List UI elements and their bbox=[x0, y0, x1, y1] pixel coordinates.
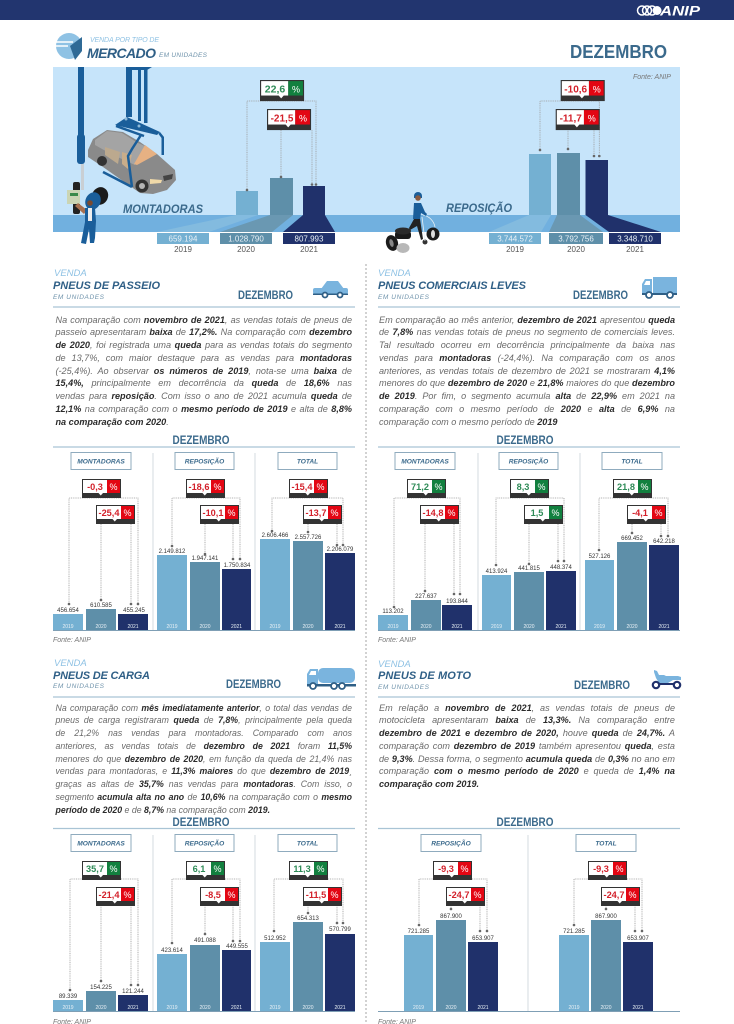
group: reposição: 1,5 bbox=[531, 508, 543, 518]
label: MONTADORAS: MONTADORAS bbox=[123, 202, 203, 216]
group: total: 654.313 bbox=[297, 916, 320, 922]
group: montadoras: 35,7 bbox=[86, 864, 104, 874]
text: comerciais leves analysis: comparação com o mesmo período de 2019 bbox=[379, 417, 557, 427]
chart: montadoras bars: 2021 bbox=[300, 245, 318, 254]
callout: -21,5%: -21,5 bbox=[271, 114, 294, 124]
group: montadoras: 2019 bbox=[62, 624, 74, 630]
group: total: 11,3 bbox=[293, 864, 311, 874]
chart: reposição bars: 2020 bbox=[567, 245, 585, 254]
group: total: -13,7 bbox=[306, 508, 326, 518]
text: carga analysis: pneus de carga registraram queda de 7,8%, principalmente pela queda bbox=[56, 715, 352, 725]
text: passeio analysis: na comparação com 2020. bbox=[56, 417, 169, 427]
text: passeio analysis: vendas para reposição. Com isso o ano de 2021 acumula queda de bbox=[56, 391, 352, 401]
group: reposição: 413.924 bbox=[486, 569, 508, 575]
text: comerciais leves analysis: Em comparação ao mês anterior, dezembro de 2021 apresentou queda bbox=[379, 314, 675, 324]
heading: pneus de passeio: VENDA bbox=[54, 268, 87, 279]
text: carga analysis: menores do que dezembro de 2020, em função da queda de 21,4% nas bbox=[56, 754, 352, 764]
text: comerciais leves analysis bbox=[379, 314, 675, 430]
group: total: 2020 bbox=[626, 624, 638, 630]
group: montadoras: 71,2 bbox=[411, 482, 429, 492]
group: total: 570.799 bbox=[329, 927, 352, 933]
text: carga analysis: anteriores, as vendas totais de dezembro de 2021 foram 11,5% bbox=[56, 741, 352, 751]
title block: VENDA POR TIPO DE bbox=[90, 37, 159, 44]
callout: -10,6% bbox=[561, 80, 605, 101]
group: reposição: -24,7 bbox=[449, 890, 469, 900]
chart: montadoras bars bbox=[157, 101, 335, 254]
group: total: TOTAL bbox=[595, 840, 617, 848]
group: reposição: % bbox=[227, 508, 236, 518]
group: total: % bbox=[316, 864, 325, 874]
group: reposição: 2020 bbox=[445, 1005, 457, 1011]
group: total: % bbox=[330, 508, 339, 518]
group: reposição: 448.374 bbox=[550, 565, 572, 571]
group: montadoras: 2020 bbox=[95, 624, 107, 630]
chart panel: comerciais leves dezembro: DEZEMBRO bbox=[496, 435, 554, 447]
group: montadoras: % bbox=[123, 508, 132, 518]
group: reposição: -9,3 bbox=[438, 864, 454, 874]
group: montadoras bbox=[53, 834, 148, 1011]
group: montadoras: MONTADORAS bbox=[77, 458, 125, 466]
panel: hero market overview bbox=[53, 67, 680, 254]
text: moto analysis: Em relação a novembro de 2021, as vendas totais de pneus de bbox=[379, 702, 675, 712]
group: reposição: 2019 bbox=[491, 624, 502, 630]
group: total: 2.606.466 bbox=[262, 533, 289, 539]
heading: comerciais leves: VENDA bbox=[378, 268, 411, 279]
text: carga analysis: de 21,2% nas vendas para montadoras. Comparado com anos bbox=[56, 728, 352, 738]
group: reposição bbox=[157, 452, 251, 630]
title block: EM UNIDADES bbox=[159, 52, 208, 59]
group: reposição: 2.149.812 bbox=[159, 549, 186, 555]
group: total: 653.907 bbox=[627, 936, 650, 942]
group: total bbox=[260, 834, 355, 1011]
heading: comerciais leves: DEZEMBRO bbox=[573, 290, 628, 302]
group: total: 2019 bbox=[594, 624, 605, 630]
icon: car bbox=[313, 281, 348, 298]
text: moto analysis bbox=[379, 702, 675, 792]
group: total: % bbox=[615, 864, 624, 874]
heading: pneus de passeio: EM UNIDADES bbox=[53, 294, 105, 301]
logo: ANIP: ANIP bbox=[659, 4, 701, 18]
chart panel: passeio dezembro: DEZEMBRO bbox=[172, 435, 230, 447]
group: montadoras: 113.202 bbox=[382, 609, 404, 615]
group: total: 867.900 bbox=[595, 914, 618, 920]
group: reposição: -10,1 bbox=[203, 508, 223, 518]
callout: -21,5% bbox=[267, 109, 311, 130]
group: reposição: 2021 bbox=[231, 624, 242, 630]
text: moto analysis: motocicleta apresentaram baixa de 13,3%. Na comparação entre bbox=[379, 715, 675, 725]
group: montadoras: 154.225 bbox=[90, 985, 112, 991]
illustration: worker with tires bbox=[384, 192, 440, 253]
callout: -11,7%: -11,7 bbox=[560, 114, 582, 124]
group: reposição: 2019 bbox=[166, 624, 178, 630]
group: reposição: REPOSIÇÃO bbox=[185, 838, 225, 848]
heading: pneus de carga bbox=[53, 658, 355, 697]
group: total: 2021 bbox=[334, 1005, 346, 1011]
group: montadoras: 2021 bbox=[127, 624, 139, 630]
chart: reposição bars: 3.348.710 bbox=[617, 235, 653, 244]
group: reposição: 2021 bbox=[555, 624, 567, 630]
text: passeio analysis: (-25,4%). Ao observar os números de 2019, nota-se uma baixa de bbox=[56, 366, 352, 376]
heading: pneus de moto bbox=[378, 659, 680, 697]
icon: truck bbox=[642, 277, 677, 298]
heading: comerciais leves: EM UNIDADES bbox=[378, 294, 430, 301]
group: reposição: 6,1 bbox=[193, 864, 205, 874]
group: total: 2019 bbox=[568, 1005, 580, 1011]
heading: pneus de moto: EM UNIDADES bbox=[378, 684, 430, 691]
text: comerciais leves analysis: Tal resultado ocorreu em decorrência principalmente da baixa nas bbox=[379, 340, 675, 350]
group: reposição: % bbox=[473, 890, 482, 900]
group: reposição: 2021 bbox=[477, 1005, 489, 1011]
group: total: % bbox=[654, 508, 663, 518]
callout: -10,6%: -10,6 bbox=[564, 84, 588, 96]
group: montadoras: 2021 bbox=[127, 1005, 139, 1011]
group: montadoras: 456.654 bbox=[57, 608, 80, 614]
chart: montadoras bars: 1.028.790 bbox=[228, 235, 264, 244]
text: passeio analysis: passeio apresentaram baixa de 17,2%. Na comparação com dezembro bbox=[56, 327, 352, 337]
group: montadoras: -14,8 bbox=[423, 508, 443, 518]
chart: reposição bars: 3.792.756 bbox=[558, 235, 594, 244]
heading: comerciais leves bbox=[378, 268, 680, 307]
callout: -10,6%: % bbox=[593, 84, 601, 94]
group: total: TOTAL bbox=[621, 458, 643, 466]
group: total: 721.285 bbox=[563, 929, 586, 935]
group: total: 21,8 bbox=[617, 482, 635, 492]
text: carga analysis: graças as altas de 35,7% nas vendas para montadoras. Com isso, o bbox=[56, 779, 352, 789]
group: total: % bbox=[640, 482, 649, 492]
heading: pneus de carga: PNEUS DE CARGA bbox=[53, 670, 150, 682]
section: pneus de carga bbox=[53, 658, 356, 1024]
text: passeio analysis: de 13,7%, com maior destaque para as vendas para montadoras bbox=[56, 353, 352, 363]
group: reposição bbox=[157, 834, 251, 1011]
chart panel: carga dezembro bbox=[53, 817, 355, 1024]
group: montadoras: 2020 bbox=[95, 1005, 107, 1011]
illustration: car on lift with worker bbox=[67, 67, 176, 244]
text: comerciais leves analysis: de 7,8% nas vendas totais de pneus no segmento de comerciais leves. bbox=[379, 327, 675, 337]
group: reposição: 721.285 bbox=[408, 929, 430, 935]
group: reposição: 1.947.141 bbox=[192, 556, 219, 562]
panel: hero market overview: Fonte: ANIP bbox=[633, 74, 671, 81]
group: total: 2.557.726 bbox=[295, 535, 322, 541]
group: total: 2.206.079 bbox=[327, 547, 354, 553]
text: passeio analysis bbox=[56, 314, 352, 430]
group: total: -11,5 bbox=[306, 890, 326, 900]
group: reposição: 2020 bbox=[523, 624, 535, 630]
callout: -21,5%: % bbox=[299, 114, 307, 124]
chart: montadoras bars: 659.194 bbox=[169, 235, 198, 244]
text: comerciais leves analysis: menores do que dezembro de 2020 e 21,8% maiores do que dezembro bbox=[379, 378, 675, 388]
group: reposição: % bbox=[551, 508, 560, 518]
group: total: 642.218 bbox=[653, 539, 676, 545]
heading: pneus de moto: PNEUS DE MOTO bbox=[378, 670, 471, 682]
chart: montadoras bars: 2020 bbox=[237, 245, 255, 254]
group: total: % bbox=[628, 890, 637, 900]
group: montadoras: 610.585 bbox=[90, 603, 112, 609]
group: reposição: 2019 bbox=[413, 1005, 424, 1011]
callout: 22,6%: % bbox=[292, 84, 300, 94]
group: total: % bbox=[330, 890, 339, 900]
group: montadoras: 89.339 bbox=[59, 994, 78, 1000]
group: montadoras: MONTADORAS bbox=[401, 458, 449, 466]
chart: montadoras bars: 807.993 bbox=[295, 235, 324, 244]
group: total: 2021 bbox=[632, 1005, 644, 1011]
group: total bbox=[585, 452, 679, 630]
group: montadoras bbox=[378, 452, 472, 630]
group: reposição: 8,3 bbox=[517, 482, 529, 492]
chart panel: passeio dezembro bbox=[53, 435, 355, 644]
group: montadoras bbox=[53, 452, 148, 630]
text: passeio analysis: 12,1% na comparação com o mesmo período de 2019 e alta de 8,8% bbox=[56, 404, 352, 414]
title block bbox=[56, 33, 208, 61]
group: total: 2020 bbox=[600, 1005, 612, 1011]
group: reposição: % bbox=[213, 864, 222, 874]
text: moto analysis: comparação com 2019. bbox=[379, 779, 479, 789]
group: reposição: 653.907 bbox=[472, 936, 494, 942]
text: moto analysis: dezembro de 2021 e dezembro de 2020, houve queda de 24,7%. A bbox=[379, 728, 675, 738]
group: reposição: 491.088 bbox=[194, 938, 216, 944]
chart: reposição bars: 2019 bbox=[506, 245, 524, 254]
group: montadoras: % bbox=[434, 482, 443, 492]
callout: -11,7%: % bbox=[588, 114, 596, 124]
group: reposição: % bbox=[537, 482, 546, 492]
group: reposição: -18,6 bbox=[189, 482, 209, 492]
callout: 22,6%: 22,6 bbox=[265, 84, 285, 96]
callout: -11,7% bbox=[556, 109, 600, 130]
text: comerciais leves analysis: anteriores, as vendas totais de dezembro de 2021 se mostraram 4,1% bbox=[379, 366, 675, 376]
chart panel: comerciais leves dezembro: Fonte: ANIP bbox=[378, 637, 416, 644]
title block: MERCADO bbox=[87, 45, 156, 61]
group: total: % bbox=[316, 482, 325, 492]
label: REPOSIÇÃO: REPOSIÇÃO bbox=[446, 200, 513, 215]
text: moto analysis: comparação com o mesmo período de 2020 e queda de 1,4% na bbox=[379, 766, 675, 776]
text: passeio analysis: Na comparação com novembro de 2021, as vendas totais de pneus de bbox=[56, 314, 352, 324]
group: montadoras: 193.844 bbox=[446, 599, 468, 605]
text: passeio analysis: 15,4%, principalmente em decorrência da queda de 18,6% nas bbox=[56, 378, 352, 388]
text: moto analysis: de 9,3%. Dessa forma, o segmento acumula queda de 0,3% no ano em bbox=[379, 754, 675, 764]
text: carga analysis: segmento acumula alta no ano de 10,6% na comparação com o mesmo bbox=[56, 792, 352, 802]
group: montadoras: 2019 bbox=[62, 1005, 74, 1011]
group: reposição: 2021 bbox=[231, 1005, 242, 1011]
group: reposição: % bbox=[460, 864, 469, 874]
icon: tanker truck bbox=[307, 668, 356, 689]
heading: pneus de moto: DEZEMBRO bbox=[574, 680, 630, 692]
group: reposição: 2020 bbox=[199, 624, 211, 630]
month heading: DEZEMBRO bbox=[570, 42, 667, 62]
group: montadoras: 2021 bbox=[451, 624, 463, 630]
group: reposição: % bbox=[227, 890, 236, 900]
group: montadoras: % bbox=[123, 890, 132, 900]
group: montadoras: 227.637 bbox=[415, 594, 438, 600]
heading: pneus de carga: VENDA bbox=[54, 658, 87, 669]
group: reposição: % bbox=[213, 482, 222, 492]
logo: ANIP bbox=[638, 4, 701, 18]
heading: pneus de passeio bbox=[53, 268, 355, 307]
group: total bbox=[559, 834, 653, 1011]
group: total: 512.952 bbox=[264, 936, 286, 942]
text: comerciais leves analysis: vendas para montadoras (-24,4%). Na comparação com os anos bbox=[379, 353, 675, 363]
heading: pneus de carga: EM UNIDADES bbox=[53, 683, 105, 690]
group: total: TOTAL bbox=[297, 840, 318, 848]
group: total: 2021 bbox=[658, 624, 670, 630]
column divider bbox=[365, 264, 367, 1024]
group: reposição: REPOSIÇÃO bbox=[185, 456, 225, 466]
group: montadoras: % bbox=[109, 864, 118, 874]
heading: comerciais leves: PNEUS COMERCIAIS LEVES bbox=[378, 280, 527, 292]
group: montadoras: 2019 bbox=[387, 624, 399, 630]
chart panel: carga dezembro: DEZEMBRO bbox=[172, 817, 230, 829]
section: pneus comerciais leves bbox=[378, 268, 680, 644]
icon: motorcycle bbox=[653, 670, 681, 688]
group: total: 2021 bbox=[334, 624, 346, 630]
group: reposição: 441.815 bbox=[518, 566, 540, 572]
group: total: -15,4 bbox=[292, 482, 313, 492]
group: montadoras: % bbox=[447, 508, 456, 518]
group: total: -24,7 bbox=[604, 890, 624, 900]
group: total: 2019 bbox=[269, 624, 281, 630]
group: montadoras: % bbox=[109, 482, 118, 492]
group: total: -9,3 bbox=[593, 864, 609, 874]
text: carga analysis: vendas para montadoras, e 11,3% maiores do que dezembro de 2019¸ bbox=[56, 766, 352, 776]
header bar bbox=[0, 0, 734, 20]
heading: pneus de passeio: PNEUS DE PASSEIO bbox=[53, 280, 160, 292]
heading: pneus de moto: VENDA bbox=[378, 659, 411, 670]
group: reposição: 2020 bbox=[199, 1005, 211, 1011]
group: montadoras: 455.245 bbox=[123, 608, 146, 614]
group: total bbox=[260, 452, 355, 630]
chart panel: moto dezembro: DEZEMBRO bbox=[496, 817, 554, 829]
group: total: 669.452 bbox=[621, 536, 644, 542]
group: reposição: 1.750.834 bbox=[224, 563, 251, 569]
group: total: TOTAL bbox=[297, 458, 318, 466]
group: total: 527.126 bbox=[589, 554, 611, 560]
group: reposição: -8,5 bbox=[205, 890, 221, 900]
group: reposição: 449.555 bbox=[226, 944, 248, 950]
heading: pneus de passeio: DEZEMBRO bbox=[238, 290, 293, 302]
group: montadoras: -21,4 bbox=[99, 890, 120, 900]
text: carga analysis: período de 2020 e de 8,7% na comparação com 2019. bbox=[56, 805, 270, 815]
section: pneus de moto bbox=[378, 659, 681, 1024]
group: total: -4,1 bbox=[632, 508, 648, 518]
group: montadoras: -25,4 bbox=[99, 508, 120, 518]
text: passeio analysis: de 2020, foi registrada uma queda para as vendas totais do segmento bbox=[56, 340, 352, 350]
group: reposição: 423.614 bbox=[161, 948, 184, 954]
group: reposição bbox=[482, 452, 576, 630]
chart panel: passeio dezembro: Fonte: ANIP bbox=[53, 637, 91, 644]
group: montadoras: 2020 bbox=[420, 624, 432, 630]
group: montadoras: 121.244 bbox=[122, 989, 144, 995]
chart: montadoras bars: 2019 bbox=[174, 245, 192, 254]
text: comerciais leves analysis: de 2019. Por fim, o segmento acumula alta de 22,9% em 2021 na bbox=[379, 391, 675, 401]
callout: 22,6% bbox=[260, 80, 304, 101]
text: comerciais leves analysis: comparação com o mesmo período de 2020 e alta de 6,9% na bbox=[379, 404, 675, 414]
group: reposição: REPOSIÇÃO bbox=[431, 838, 472, 848]
text: moto analysis: comparação com dezembro de 2019 também apresentou queda, esta bbox=[379, 741, 675, 751]
text: carga analysis bbox=[56, 702, 352, 818]
group: reposição: 867.900 bbox=[440, 914, 462, 920]
chart: reposição bars: 3.744.572 bbox=[497, 235, 533, 244]
group: montadoras: MONTADORAS bbox=[77, 840, 125, 848]
group: total: 2020 bbox=[302, 1005, 314, 1011]
text: carga analysis: Na comparação com mês imediatamente anterior, o total das vendas de bbox=[56, 702, 352, 712]
group: total: 2020 bbox=[302, 624, 314, 630]
heading: pneus de carga: DEZEMBRO bbox=[226, 679, 281, 691]
chart: reposição bars bbox=[489, 101, 661, 254]
section: pneus de passeio bbox=[53, 268, 355, 644]
group: reposição: REPOSIÇÃO bbox=[509, 456, 549, 466]
chart: reposição bars: 2021 bbox=[626, 245, 644, 254]
chart panel: moto dezembro bbox=[378, 817, 680, 1024]
group: reposição bbox=[404, 834, 498, 1011]
chart panel: comerciais leves dezembro bbox=[378, 435, 680, 644]
group: montadoras: -0,3 bbox=[87, 482, 103, 492]
group: reposição: 2019 bbox=[166, 1005, 178, 1011]
group: total: 2019 bbox=[269, 1005, 281, 1011]
